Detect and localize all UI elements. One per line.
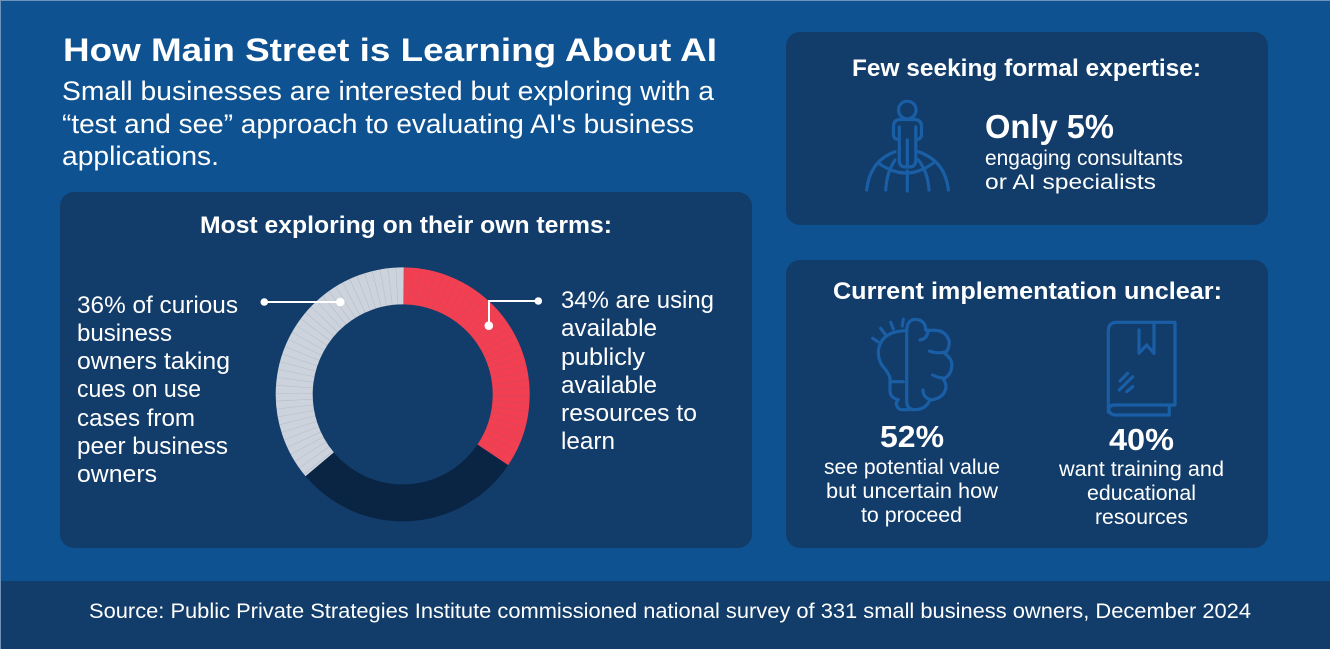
text: want training: want training and	[1058, 458, 1224, 481]
text: 36% peer business owners: cases from	[77, 405, 195, 432]
text: see potential value: but uncertain how	[826, 480, 999, 503]
subtitle	[62, 76, 715, 171]
subtitle: Small businesses are interested but exploring with a	[62, 76, 715, 106]
stat: 52%: 52%	[880, 419, 944, 454]
text: 36% peer business owners: 36% of curious	[77, 292, 238, 319]
stat: 40%: 40%	[1109, 422, 1174, 457]
text: see potential value: see potential value	[824, 456, 1000, 479]
text: 34% public resources: learn	[561, 428, 615, 455]
icon: person standing on globe	[867, 101, 948, 191]
title: How Main Street is Learning About AI	[63, 32, 717, 68]
text: 34% public resources	[561, 287, 714, 455]
text: 34% public resources: available	[561, 315, 657, 342]
donut chart	[250, 242, 556, 547]
panel heading: current implementation: Current implementation unclear:	[833, 278, 1222, 305]
panel: current implementation unclear	[786, 260, 1268, 548]
source note: Source: Public Private Strategies Institute commissioned national survey of 331 small business owners, December 2024	[89, 600, 1251, 623]
callout leader: 36%	[260, 298, 345, 306]
text: 36% peer business owners: business	[77, 320, 172, 347]
text: 36% peer business owners: peer business	[77, 433, 228, 460]
text: 34% public resources: publicly	[561, 344, 645, 371]
text: 36% peer business owners: owners	[77, 461, 157, 488]
text: 36% peer business owners: owners taking	[77, 348, 230, 375]
text: see potential value: to proceed	[861, 504, 962, 527]
icon: book with bookmark	[1108, 322, 1175, 415]
panel heading: few seeking: Few seeking formal expertise:	[852, 55, 1201, 82]
text: engaging consultants	[985, 147, 1183, 194]
panel: most exploring on their own terms	[60, 192, 752, 548]
text: 36% peer business owners	[77, 292, 238, 488]
stat: only 5%: Only 5%	[985, 108, 1114, 145]
text: 36% peer business owners: cues on use	[77, 376, 201, 403]
text: want training	[1058, 458, 1224, 529]
panel: few seeking formal expertise	[786, 32, 1268, 225]
text: want training: resources	[1095, 506, 1188, 529]
text: 34% public resources: available	[561, 372, 657, 399]
text: engaging consultants: or AI specialists	[985, 171, 1156, 194]
text: want training: educational	[1087, 482, 1196, 505]
callout leader: 34%	[484, 297, 542, 330]
text: see potential value	[824, 456, 1000, 527]
subtitle: applications.	[62, 141, 219, 171]
icon: brain and light bulb	[873, 319, 952, 410]
subtitle: “test and see” approach to evaluating AI's business	[62, 109, 694, 139]
text: 34% public resources: resources to	[561, 400, 697, 427]
text: 34% public resources: 34% are using	[561, 287, 714, 314]
panel heading: most exploring: Most exploring on their own terms:	[200, 212, 612, 239]
footer band with source	[0, 581, 1330, 649]
text: engaging consultants: engaging consultants	[985, 147, 1183, 170]
